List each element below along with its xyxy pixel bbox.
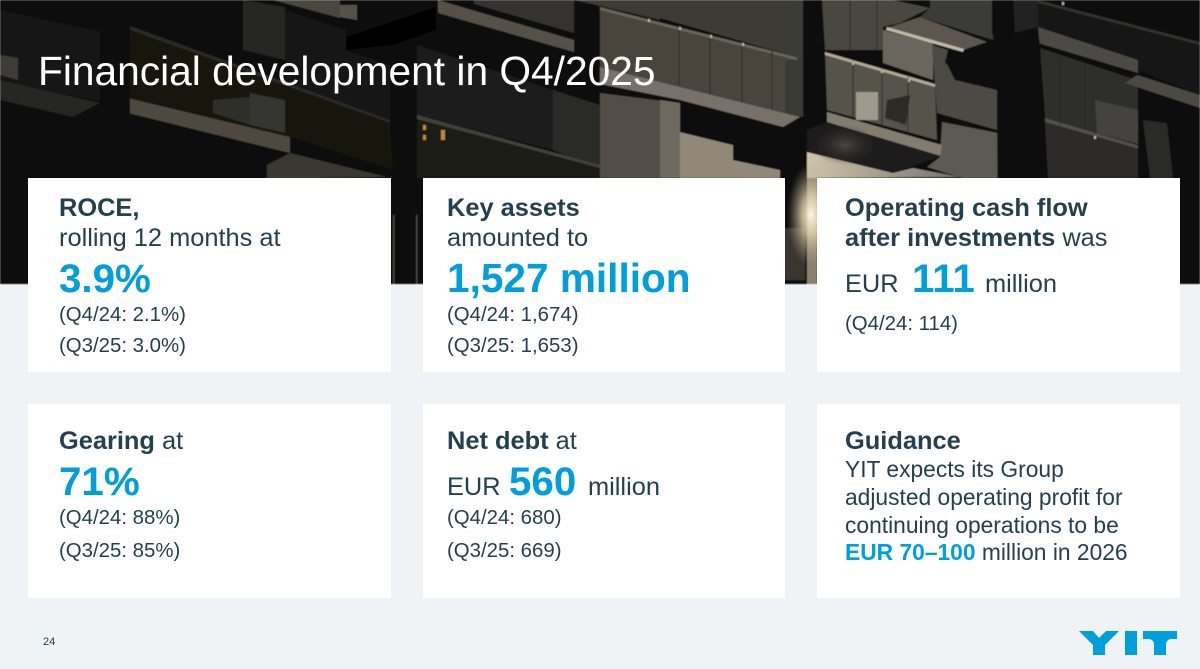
panel: key assets: Key assets	[447, 194, 580, 222]
value: ROCE: 3.9%	[59, 256, 151, 301]
page number: 24	[43, 636, 55, 648]
value: gearing: 71%	[59, 459, 140, 504]
panel: guidance: continuing operations to be	[845, 512, 1119, 538]
panel: operating cash flow: Operating cash flow	[845, 194, 1088, 222]
panel: guidance	[817, 404, 1180, 598]
panel: net debt	[423, 404, 785, 598]
value: cash flow: 111	[912, 256, 975, 301]
panel: ROCE: (Q3/25: 3.0%)	[59, 335, 186, 357]
photo: building facade at dusk	[0, 0, 1200, 284]
panel: guidance: Guidance	[845, 427, 961, 455]
panel: operating cash flow: after investments was	[845, 224, 1107, 252]
panel: gearing: Gearing at	[59, 427, 183, 455]
panel: gearing: (Q3/25: 85%)	[59, 540, 180, 562]
panel: ROCE: ROCE,	[59, 194, 139, 222]
panel: operating cash flow	[817, 178, 1180, 372]
panel: net debt: (Q3/25: 669)	[447, 540, 561, 562]
value: net debt: 560	[509, 459, 576, 504]
title: Financial development in Q4/2025	[38, 48, 656, 94]
panel: key assets	[423, 178, 785, 372]
panel: ROCE	[28, 178, 391, 372]
panel: guidance: adjusted operating profit for	[845, 484, 1123, 510]
panel: net debt: million	[588, 473, 660, 501]
panel: net debt: Net debt at	[447, 427, 577, 455]
panel: key assets: (Q3/25: 1,653)	[447, 335, 578, 357]
panel: key assets: amounted to	[447, 224, 588, 252]
panel: guidance: EUR 70–100 million in 2026	[845, 539, 1128, 565]
panel: operating cash flow: (Q4/24: 114)	[845, 313, 958, 335]
panel: net debt: (Q4/24: 680)	[447, 507, 561, 529]
value: key assets: 1,527 million	[447, 255, 691, 301]
icon: YIT logo	[1079, 631, 1177, 655]
panel: gearing	[28, 404, 391, 598]
panel: ROCE: rolling 12 months at	[59, 224, 281, 252]
panel: operating cash flow: million	[985, 270, 1057, 298]
panel: net debt: EUR	[447, 473, 501, 501]
panel: guidance: YIT expects its Group	[845, 456, 1064, 482]
panel: ROCE: (Q4/24: 2.1%)	[59, 304, 186, 326]
panel: key assets: (Q4/24: 1,674)	[447, 304, 578, 326]
panel: operating cash flow: EUR	[845, 270, 899, 298]
panel: gearing: (Q4/24: 88%)	[59, 507, 180, 529]
